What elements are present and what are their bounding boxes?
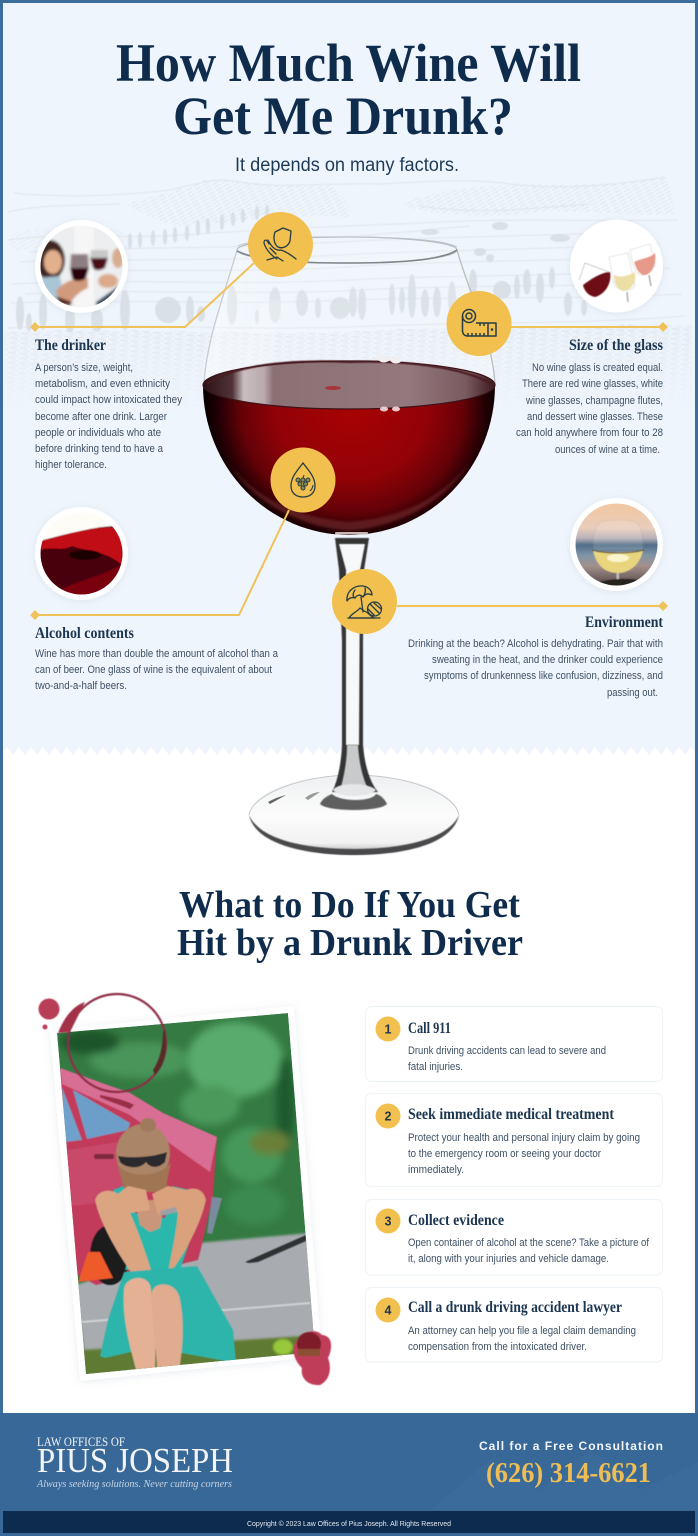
heading: Size of the glass: Size of the glass [569,337,663,354]
text block: The drinker [35,337,182,471]
body: Size of the glass: and dessert wine glasses. These [527,411,663,423]
body: Environment: Drinking at the beach? Alcohol is dehydrating. Pair that with [408,638,663,650]
body: Environment: sweating in the heat, and the drinker could experience [432,654,663,666]
number badge 4 [376,1298,400,1322]
body: Collect evidence: Open container of alcohol at the scene? Take a picture of [408,1237,650,1249]
heading: Seek immediate medical treatment: Seek immediate medical treatment [408,1106,615,1123]
wine glass [203,237,495,855]
body: Environment [408,638,663,699]
icon: hand holding wine glass [248,212,313,277]
body: Size of the glass: ounces of wine at a time. [555,444,660,456]
body: Seek immediate medical treatment [408,1132,640,1176]
copyright bar: Copyright © 2023 Law Offices of Pius Joseph. All Rights Reserved [247,1519,451,1528]
number badge 1: 1 [385,1022,392,1036]
body: Seek immediate medical treatment: immediately. [408,1164,464,1176]
heading: Alcohol contents: Alcohol contents [35,625,134,642]
grass [84,1334,302,1374]
photo: people toasting [35,220,128,313]
number badge 3 [376,1208,400,1234]
step cards [366,1006,662,1362]
wine stain ring [38,994,166,1109]
card: step 4 [366,1288,662,1362]
icon: beach umbrella [332,569,397,634]
heading: what to do [177,884,523,964]
heading: The drinker: The drinker [35,337,106,354]
body: Size of the glass: wine glasses, champagne flutes, [525,395,663,407]
text block: Size of the glass [516,337,663,456]
body: Environment: symptoms of drunkenness like confusion, dizziness, and [424,670,663,682]
body: Call a drunk driving accident lawyer [408,1325,636,1353]
number badge 3: 3 [385,1214,392,1228]
firm logo: LAW OFFICES OF [37,1435,125,1449]
title: How Much Wine Will [116,33,581,93]
title: Get Me Drunk? [173,86,513,146]
card: step 3 [366,1200,662,1275]
body: The drinker: before drinking tend to have a [35,443,164,455]
body: The drinker: higher tolerance. [35,459,107,471]
connector end diamonds [30,322,668,620]
photo: woman after car crash [50,1006,322,1381]
body: The drinker [35,362,182,471]
photo frame [50,1006,322,1381]
number badge 2 [376,1104,400,1128]
body: Seek immediate medical treatment: to the emergency room or seeing your doctor [408,1148,601,1160]
woman [95,1118,236,1370]
photo: white wine at beach [570,498,663,591]
body: Call 911: fatal injuries. [408,1061,463,1073]
text block: Alcohol contents [35,625,279,692]
firm logo: Always seeking solutions. Never cutting corners [36,1479,232,1490]
heading: Call a drunk driving accident lawyer: Call a drunk driving accident lawyer [408,1299,622,1316]
text block: Environment [408,614,664,699]
firm logo [36,1435,233,1490]
photo: red wine splash [35,507,128,600]
vineyard landscape sketch [6,176,691,365]
body: The drinker: could impact how intoxicated they [35,394,182,406]
road [78,1232,314,1354]
photo scene [57,1013,320,1380]
body: The drinker: people or individuals who ate [35,427,161,439]
phone number: (626) 314-6621 [486,1458,651,1489]
body: Call a drunk driving accident lawyer: An attorney can help you file a legal claim demanding [408,1325,636,1337]
body: Collect evidence [408,1237,650,1265]
card: step 2 [366,1094,662,1186]
body: Call 911: Drunk driving accidents can lead to severe and [408,1045,606,1057]
body: Alcohol contents: Wine has more than double the amount of alcohol than a [35,648,279,660]
body: Size of the glass: can hold anywhere from four to 28 [516,427,663,439]
body: Alcohol contents: two-and-a-half beers. [35,680,127,692]
firm logo: PIUS JOSEPH [37,1441,233,1480]
number badge 1 [376,1016,400,1042]
body: Environment: passing out. [607,687,658,699]
body: Alcohol contents [35,648,279,692]
heading: Collect evidence: Collect evidence [408,1212,504,1229]
heading: what to do: Hit by a Drunk Driver [177,922,523,964]
body: Size of the glass: There are red wine glasses, white [522,378,663,390]
body: Call a drunk driving accident lawyer: compensation from the intoxicated driver. [408,1341,587,1353]
number badge 2: 2 [385,1110,392,1124]
icon: grape drop [270,448,336,512]
heading: what to do: What to Do If You Get [179,884,520,926]
heading: Call 911: Call 911 [408,1020,451,1037]
body: The drinker: A person’s size, weight, [35,362,133,374]
body: Seek immediate medical treatment: Protect your health and personal injury claim by going [408,1132,640,1144]
copyright bar [3,1511,695,1533]
body: Call 911 [408,1045,606,1073]
body: The drinker: become after one drink. Larger [35,411,167,423]
subtitle: It depends on many factors. [235,155,459,176]
car [60,1068,306,1285]
glass bowl [204,237,495,395]
photo: three wine glasses [570,220,663,312]
connector lines [35,263,663,615]
wine splatter [294,1331,331,1385]
body: The drinker: metabolism, and even ethnicity [35,378,170,390]
card: step 1 [366,1006,662,1082]
body: Size of the glass: No wine glass is created equal. [532,362,663,374]
heading: Environment: Environment [585,614,664,631]
panel: wine factors background [0,0,698,755]
body: Alcohol contents: can of beer. One glass of wine is the equivalent of about [35,664,272,676]
icon: measuring tape [446,291,512,356]
body: Collect evidence: it, along with your injuries and vehicle damage. [408,1253,609,1265]
footer [0,1413,698,1536]
body: Size of the glass [516,362,663,456]
call to action: Call for a Free Consultation [479,1439,663,1453]
number badge 4: 4 [385,1304,392,1318]
stem and foot [249,538,459,855]
wine [203,356,495,535]
title [116,33,581,146]
